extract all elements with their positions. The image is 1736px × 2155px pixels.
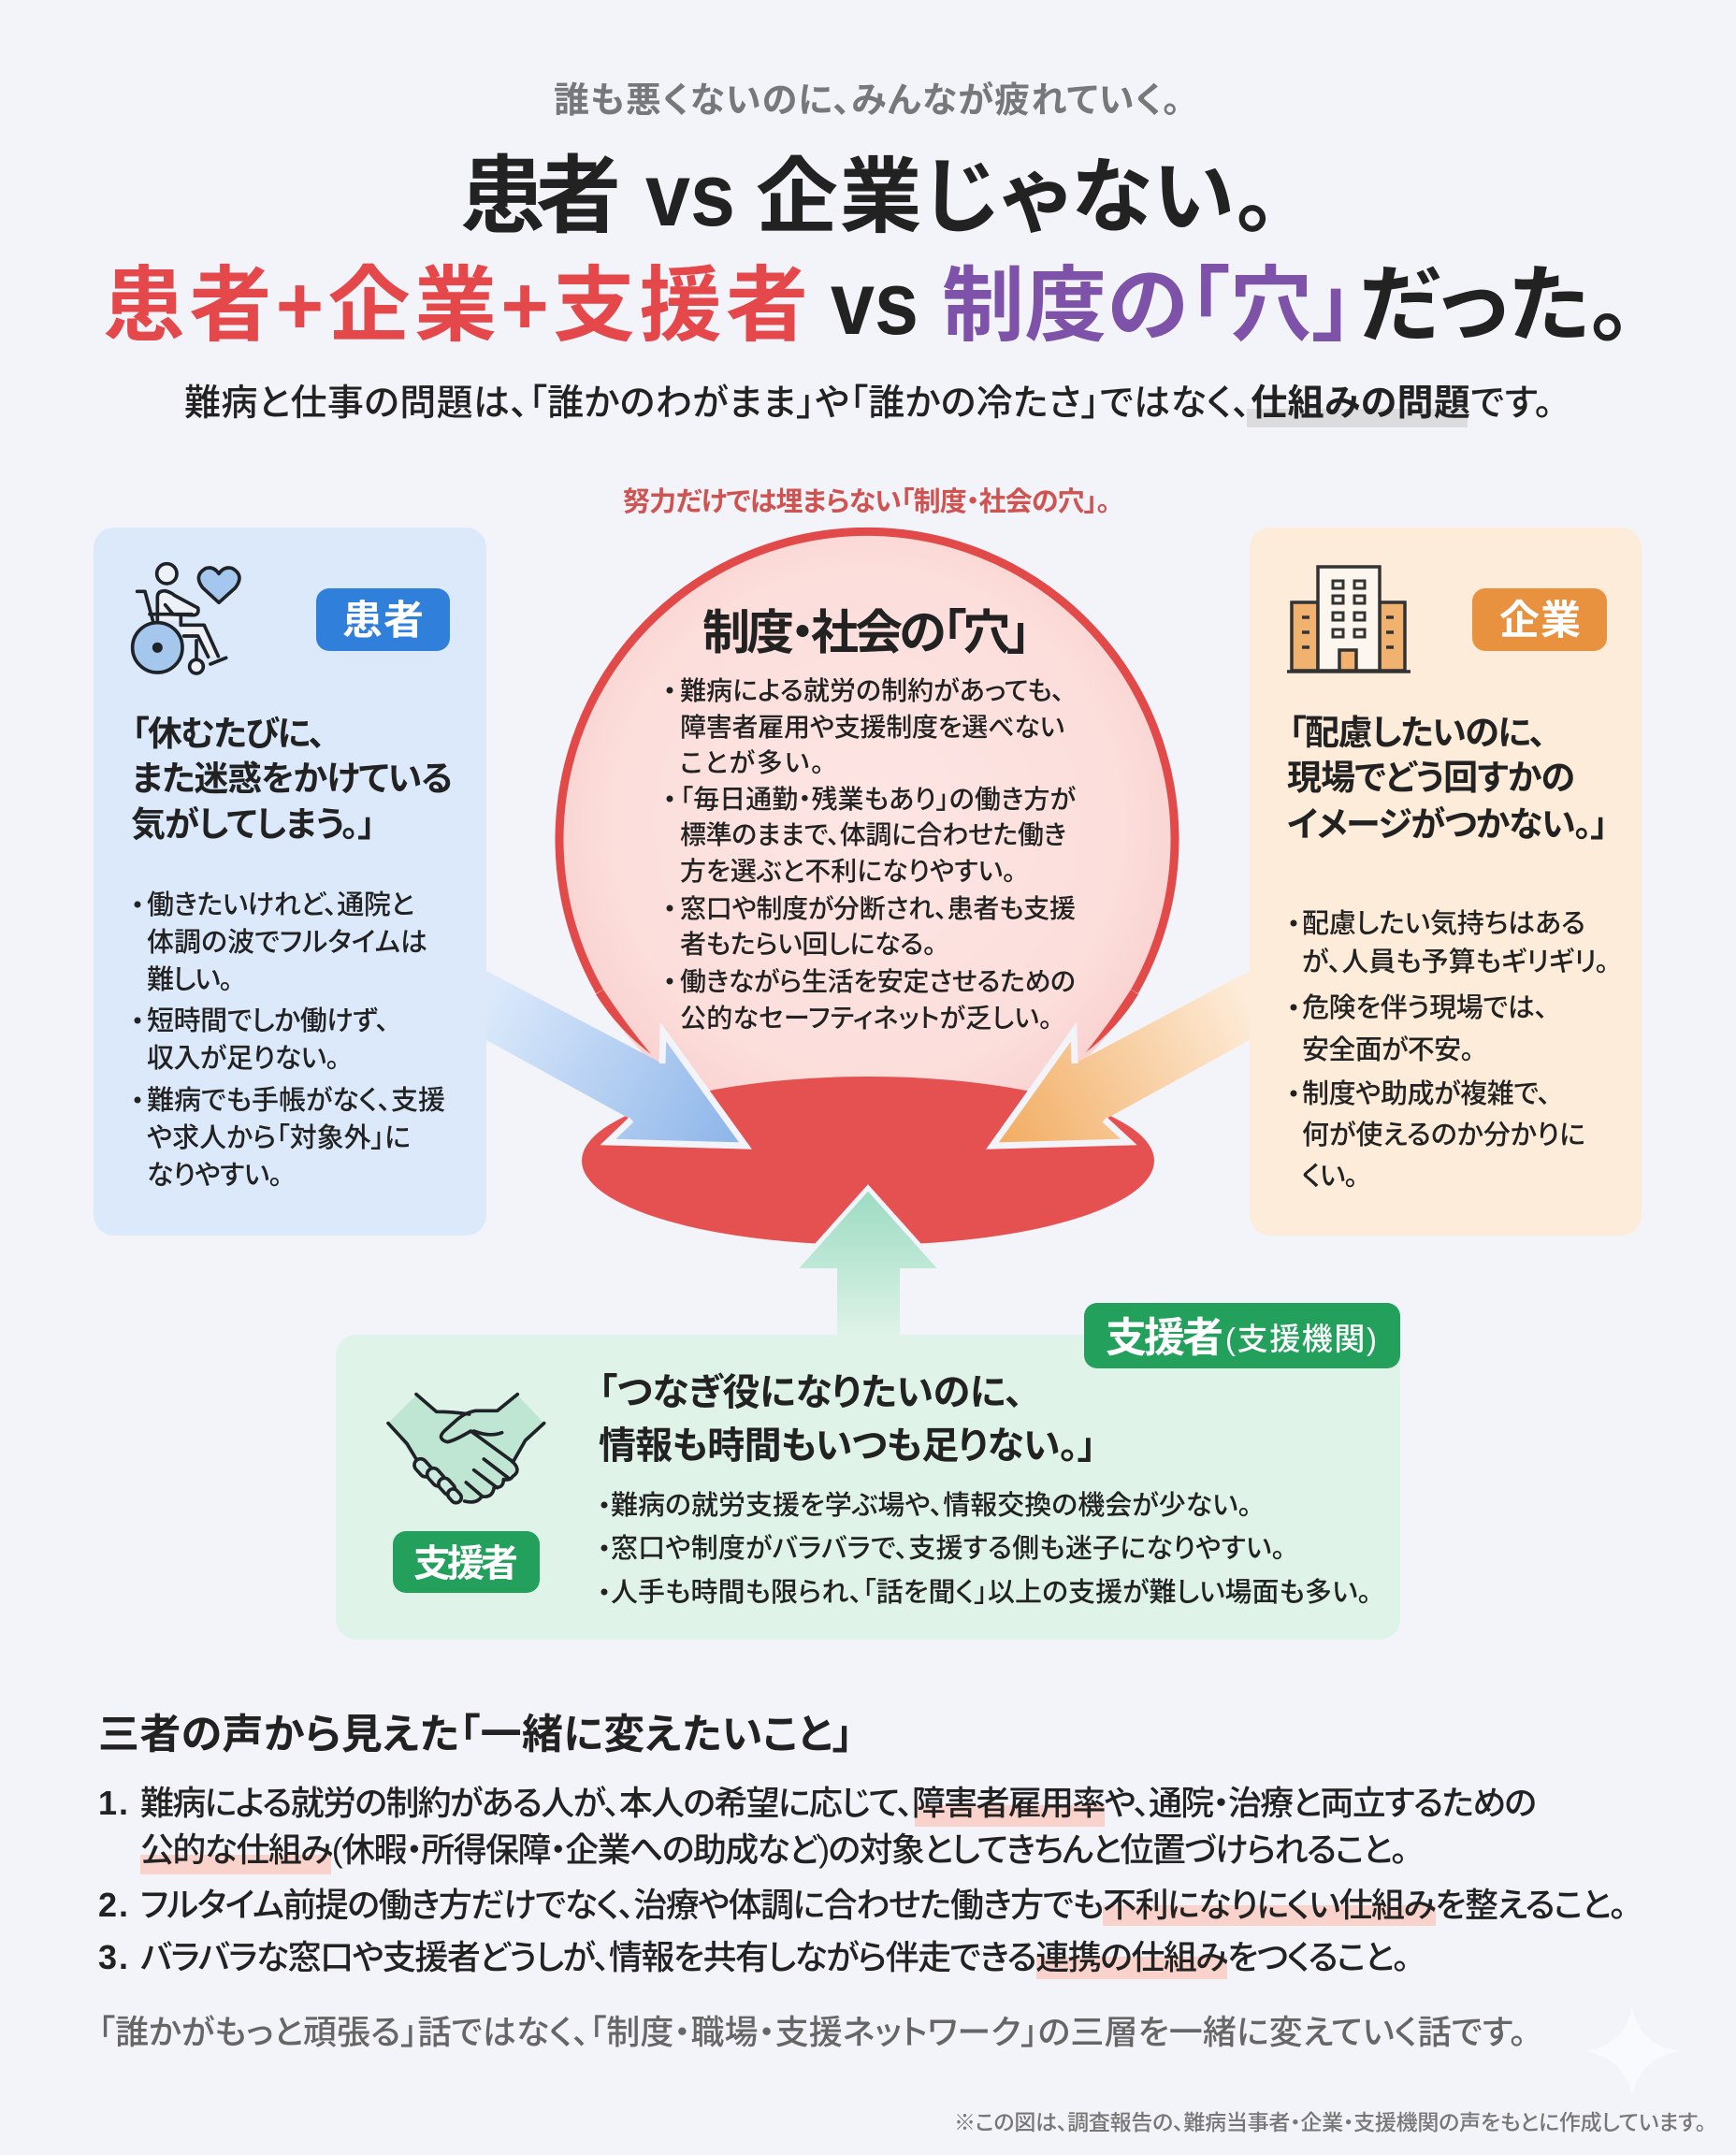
icon: handshake xyxy=(388,1395,544,1505)
list item 2: フルタイム前提の働き方だけでなく、治療や体調に合わせた働き方でも不利になりにくい仕組みを整えること。 xyxy=(140,1886,1627,1924)
section heading: 三者の声から見えた「一緒に変えたいこと」 xyxy=(98,1712,853,1757)
title line 1: 企業じゃない。 xyxy=(756,151,1277,243)
badge: supporter organisations: (支援機関) xyxy=(1225,1322,1377,1356)
panel: company xyxy=(1250,528,1642,1236)
title line 2: vs xyxy=(831,253,919,354)
title line 2 xyxy=(103,253,1632,354)
caption above hole: 努力だけでは埋まらない「制度・社会の穴」。 xyxy=(623,486,1110,517)
patient bullets: 働きたいけれど、通院と xyxy=(147,889,414,920)
badge: patient xyxy=(316,588,450,651)
circle bullets: 働きながら生活を安定させるための xyxy=(680,967,1076,996)
company bullets: が、人員も予算もギリギリ。 xyxy=(1302,947,1609,977)
badge: company: 企業 xyxy=(1499,599,1581,644)
title line 1: 患者 xyxy=(460,150,621,244)
title line 2: 制度の「穴」 xyxy=(942,259,1353,352)
patient quote: 「休むたびに、 xyxy=(132,715,326,753)
company bullets: 危険を伴う現場では、 xyxy=(1302,992,1548,1023)
patient quote xyxy=(131,715,453,844)
arrow: patient to hole xyxy=(486,971,745,1146)
badge: supporter: 支援者 xyxy=(413,1543,518,1584)
header: kicker, title and lead xyxy=(103,81,1632,427)
circle bullets: 窓口や制度が分断され、患者も支援 xyxy=(680,894,1076,923)
supporter quote: 情報も時間もいつも足りない。」 xyxy=(599,1425,1096,1467)
panel: supporter xyxy=(336,1303,1400,1640)
arrow: company to hole xyxy=(992,971,1250,1146)
circle fill xyxy=(557,530,1177,1150)
list item 1: 1. xyxy=(98,1784,128,1822)
circle bullets: 難病による就労の制約があっても、 xyxy=(680,676,1064,705)
title line 2: 患者+企業+支援者 xyxy=(103,259,808,352)
circle bullets xyxy=(666,676,1076,1033)
hole base ellipse xyxy=(582,1077,1154,1245)
list item 2: 2. xyxy=(98,1886,128,1924)
circle heading: 制度・社会の「穴」 xyxy=(702,606,1031,659)
title line 1 xyxy=(460,145,1277,245)
outline tapered end left xyxy=(596,990,651,1054)
title line 1: vs xyxy=(645,145,735,245)
list item 3: バラバラな窓口や支援者どうしが、情報を共有しながら伴走できる連携の仕組みをつくること。 xyxy=(140,1938,1410,1976)
supporter bullets xyxy=(600,1490,1371,1608)
company card xyxy=(1250,528,1642,1236)
supporter bullets: 窓口や制度がバラバラで、支援する側も迷子になりやすい。 xyxy=(611,1533,1285,1564)
kicker: 誰も悪くないのに、みんなが疲れていく。 xyxy=(554,81,1180,121)
highlights xyxy=(140,1805,1436,1979)
section: what to change together xyxy=(98,1712,1627,2051)
supporter card xyxy=(336,1335,1400,1640)
hole: system gap circle xyxy=(557,530,1177,1245)
footnote: ※この図は、調査報告の、難病当事者・企業・支援機関の声をもとに作成しています。 xyxy=(954,2110,1706,2134)
supporter quote: 「つなぎ役になりたいのに、 xyxy=(599,1372,1023,1413)
icon: office building xyxy=(1287,567,1410,672)
badge: supporter xyxy=(393,1531,540,1593)
patient bullets xyxy=(135,889,445,1191)
patient bullets: 難しい。 xyxy=(147,964,233,995)
company bullets: 制度や助成が複雑で、 xyxy=(1302,1078,1551,1109)
badge: patient: 患者 xyxy=(342,599,424,644)
company quote: イメージがつかない。」 xyxy=(1287,805,1608,844)
circle bullets: 標準のままで、体調に合わせた働き xyxy=(680,820,1066,849)
panel: patient xyxy=(94,528,486,1236)
badge: supporter organisations: 支援者 xyxy=(1106,1315,1223,1361)
patient bullets: 短時間でしか働けず、 xyxy=(147,1005,389,1036)
patient quote: 気がしてしまう。」 xyxy=(131,805,375,844)
patient bullets: 収入が足りない。 xyxy=(147,1043,340,1074)
badge: supporter organisations xyxy=(1084,1303,1400,1368)
circle bullets: ことが多い。 xyxy=(680,748,824,777)
patient quote: また迷惑をかけている xyxy=(132,759,453,798)
supporter bullets: 難病の就労支援を学ぶ場や、情報交換の機会が少ない。 xyxy=(611,1490,1251,1521)
list item 1 xyxy=(98,1784,1537,1869)
circle bullets: 方を選ぶと不利になりやすい。 xyxy=(680,857,1016,886)
company bullets: 配慮したい気持ちはある xyxy=(1302,908,1585,939)
list item 1: 難病による就労の制約がある人が、本人の希望に応じて、障害者雇用率や、通院・治療と両立するための xyxy=(140,1784,1537,1822)
lead sentence: 難病と仕事の問題は、「誰かのわがまま」や「誰かの冷たさ」ではなく、仕組みの問題です。 xyxy=(184,383,1553,424)
company bullets xyxy=(1291,908,1609,1192)
list item 3: 3. xyxy=(98,1938,128,1976)
circle outline xyxy=(559,531,1175,991)
icon: wheelchair with heart xyxy=(133,564,239,673)
title line 2: だった。 xyxy=(1358,259,1632,353)
summary sentence: 「誰かがもっと頑張る」話ではなく、「制度・職場・支援ネットワーク」の三層を一緒に変えていく話です。 xyxy=(98,2013,1526,2051)
circle bullets: 障害者雇用や支援制度を選べない xyxy=(680,713,1064,742)
company quote xyxy=(1287,714,1608,844)
company bullets: くい。 xyxy=(1302,1162,1358,1192)
company quote: 現場でどう回すかの xyxy=(1287,759,1575,797)
company bullets: 何が使えるのか分かりに xyxy=(1302,1120,1585,1150)
company bullets: 安全面が不安。 xyxy=(1302,1034,1474,1065)
supporter bullets: 人手も時間も限られ、「話を聞く」以上の支援が難しい場面も多い。 xyxy=(611,1577,1371,1608)
patient bullets: なりやすい。 xyxy=(147,1161,282,1191)
circle bullets: 公的なセーフティネットが乏しい。 xyxy=(680,1004,1052,1033)
patient bullets: 難病でも手帳がなく、支援 xyxy=(147,1085,445,1116)
circle bullets: 「毎日通勤・残業もあり」の働き方が xyxy=(680,785,1076,814)
patient bullets: 体調の波でフルタイムは xyxy=(147,927,427,958)
badge: company xyxy=(1472,588,1607,651)
list item 1: 公的な仕組み(休暇・所得保障・企業への助成など)の対象としてきちんと位置づけられること。 xyxy=(140,1830,1408,1869)
arrow: supporter to hole xyxy=(796,1188,940,1338)
lead highlight xyxy=(1247,409,1468,427)
icon: sparkle watermark xyxy=(1584,2006,1680,2097)
supporter quote xyxy=(599,1372,1096,1467)
company quote: 「配慮したいのに、 xyxy=(1289,714,1546,752)
outline tapered end right xyxy=(1086,990,1138,1052)
circle bullets: 者もたらい回しになる。 xyxy=(680,930,936,959)
patient bullets: や求人から「対象外」に xyxy=(147,1122,411,1153)
patient card xyxy=(94,528,486,1236)
